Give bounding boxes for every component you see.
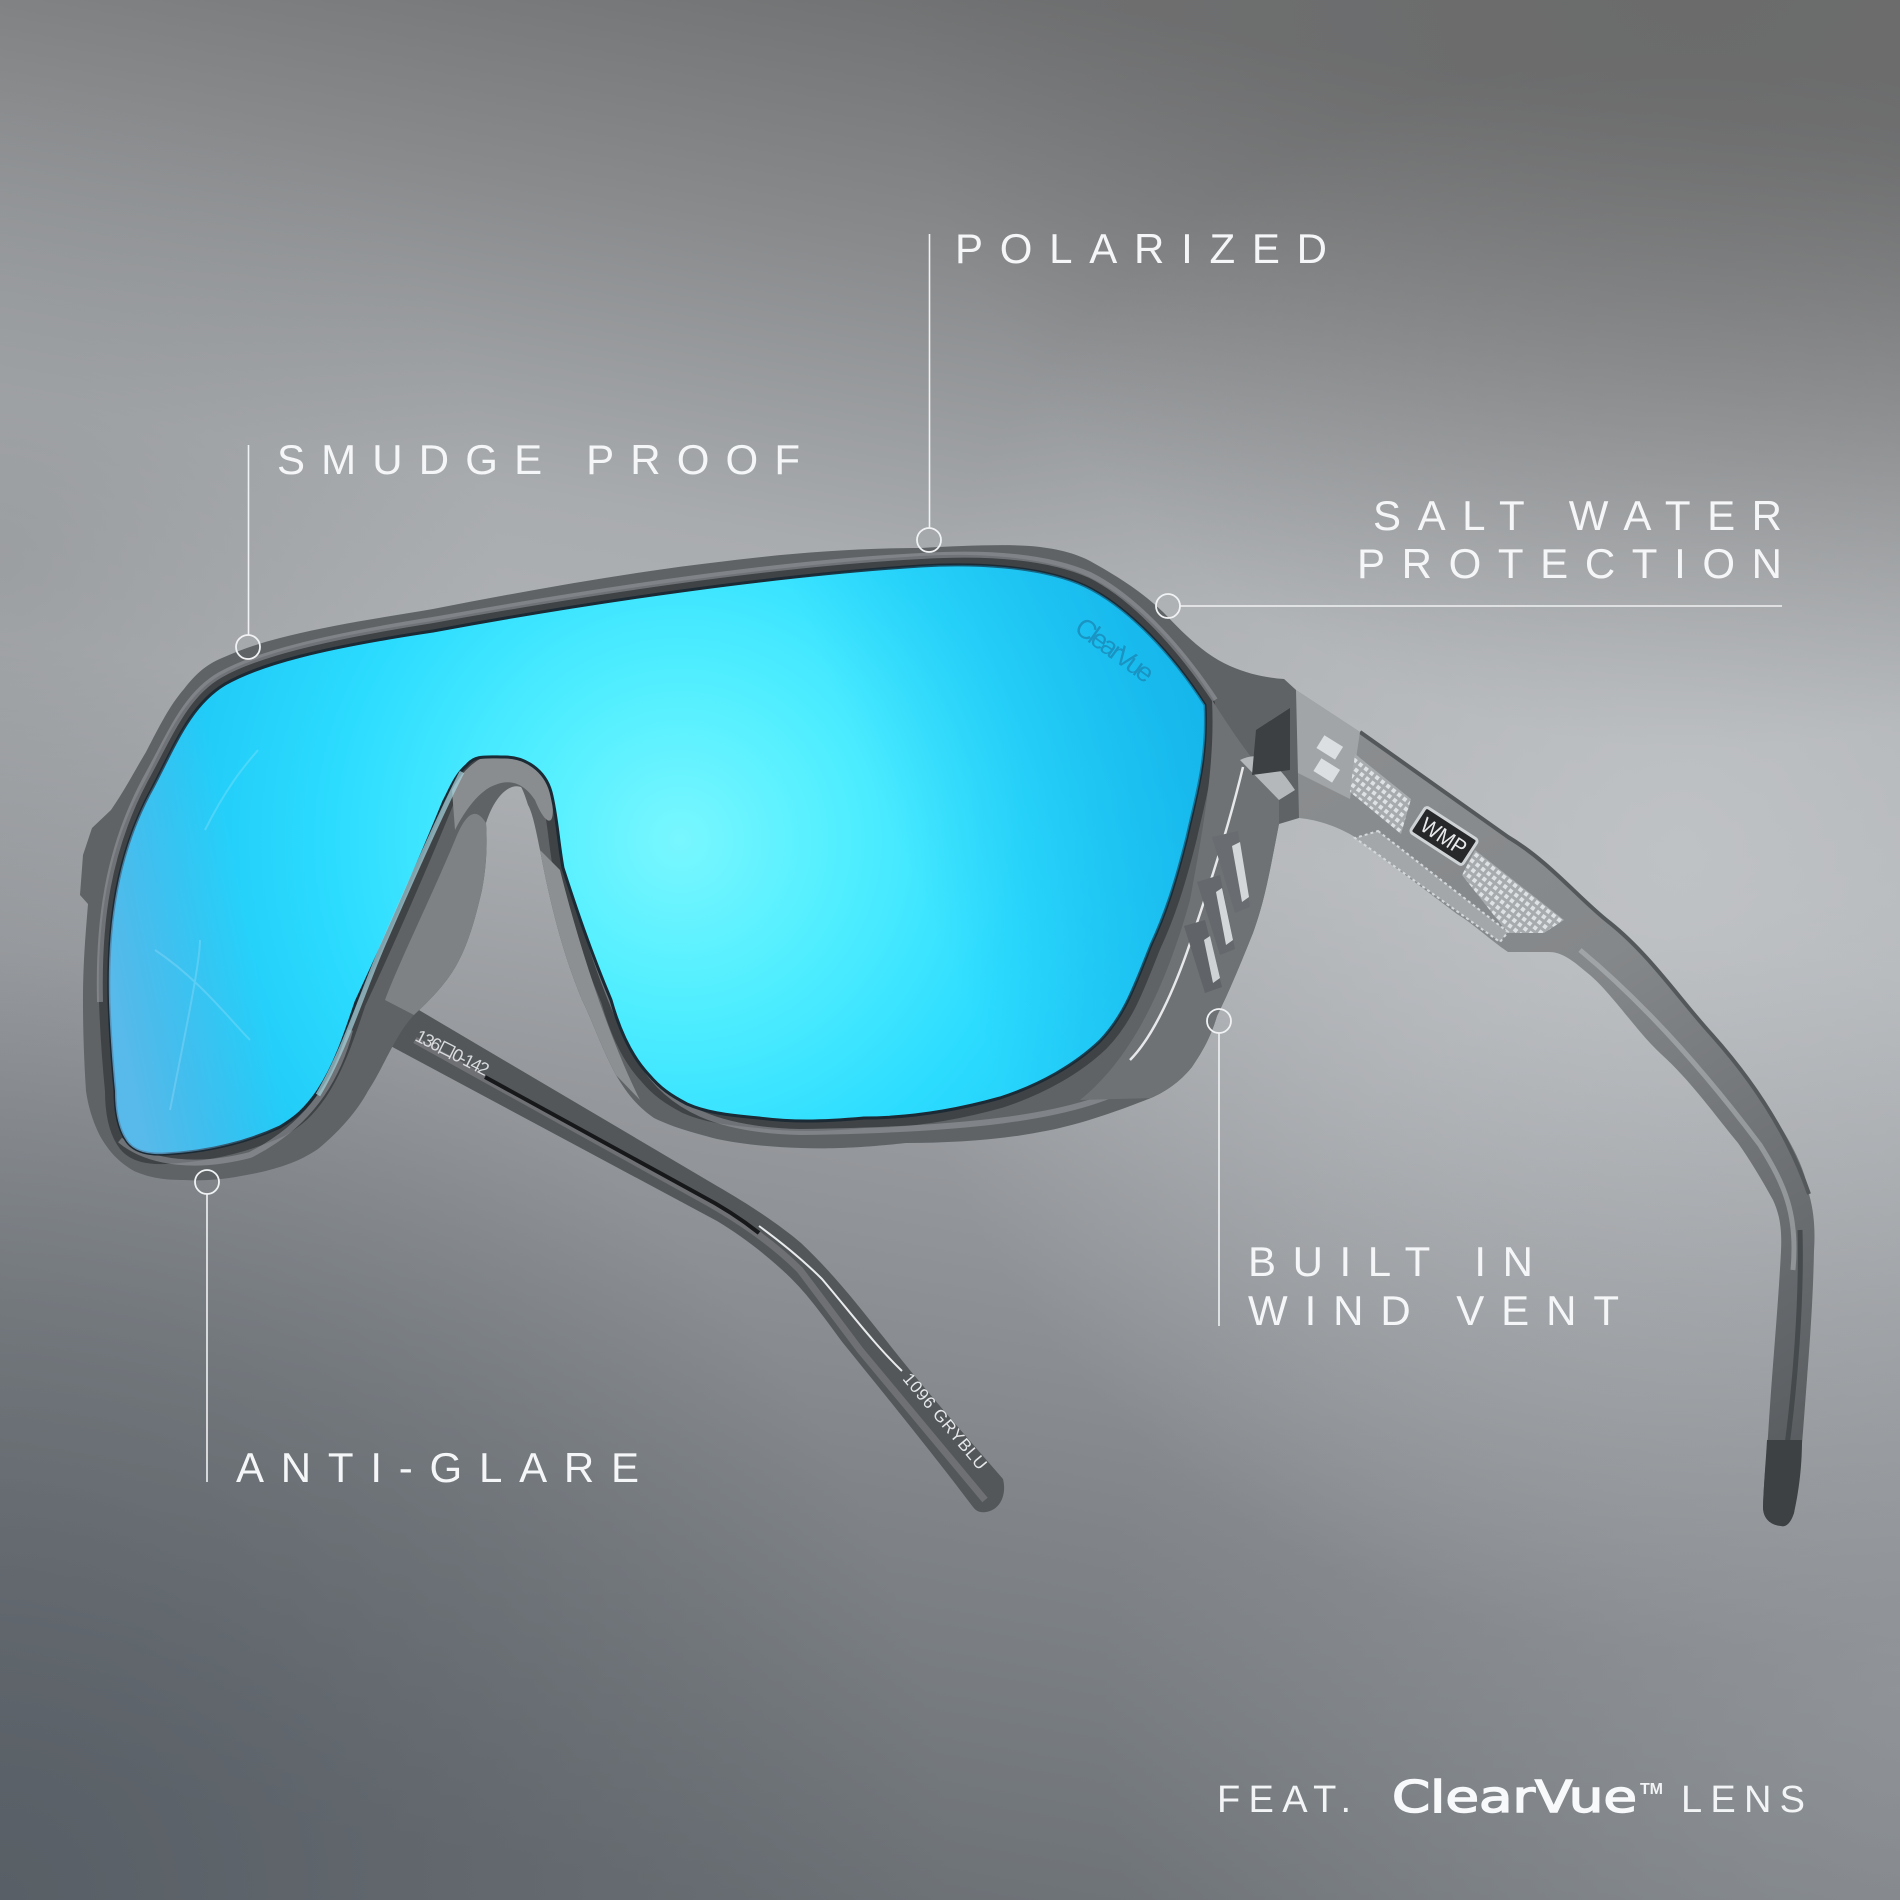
- sunglasses product illustration: [80, 545, 1814, 1526]
- temple colour code marking: 1096 GRYBLU: [899, 1369, 991, 1473]
- knurled grip lower: [1462, 850, 1564, 933]
- callout: smudge proof: [236, 436, 800, 659]
- callout: anti-glare: ANTI-GLARE: [236, 1444, 639, 1491]
- wind vent louvres: [1184, 831, 1250, 993]
- temple rubber tip: [1763, 1440, 1802, 1526]
- far temple arm: [1256, 679, 1814, 1526]
- wind vent side shield: [1080, 700, 1295, 1100]
- nose pad right: [540, 850, 640, 1100]
- footer: feat. ClearVue lens: [1217, 1772, 1805, 1823]
- main frame: [80, 545, 1299, 1180]
- callout: salt water protection: SALT WATER: [1373, 492, 1782, 539]
- temple size marking: 136口0-142: [412, 1026, 493, 1080]
- callout: built in wind vent: [1207, 1009, 1619, 1334]
- callout: salt water protection: [1156, 492, 1782, 618]
- bridge band: [452, 752, 553, 830]
- near temple arm: [370, 990, 1004, 1512]
- lens logo: ClearVue: [1069, 612, 1160, 689]
- grip strip: [1355, 831, 1508, 942]
- hinge slots: [1313, 735, 1343, 783]
- callout: built in wind vent: WIND VENT: [1248, 1287, 1619, 1334]
- callout: smudge proof: SMUDGE PROOF: [277, 436, 800, 483]
- footer: feat. ClearVue lens: TM: [1640, 1781, 1663, 1798]
- callout: polarized: [917, 225, 1327, 552]
- callout: built in wind vent: BUILT IN: [1248, 1238, 1533, 1285]
- footer: feat. ClearVue lens: ClearVue: [1392, 1772, 1637, 1823]
- callout: anti-glare: [195, 1170, 639, 1491]
- callout: polarized: POLARIZED: [955, 225, 1327, 272]
- hinge block: [1286, 690, 1360, 799]
- logo badge: WMP: [1416, 812, 1472, 861]
- footer: feat. ClearVue lens: LENS: [1681, 1779, 1805, 1821]
- hinge gap: [1256, 705, 1292, 772]
- callout: salt water protection: PROTECTION: [1357, 540, 1782, 587]
- nose pad left: [385, 814, 487, 1015]
- footer: feat. ClearVue lens: FEAT.: [1217, 1779, 1351, 1821]
- blue mirrored lens: [90, 550, 1230, 1170]
- knurled grip upper: [1350, 754, 1411, 834]
